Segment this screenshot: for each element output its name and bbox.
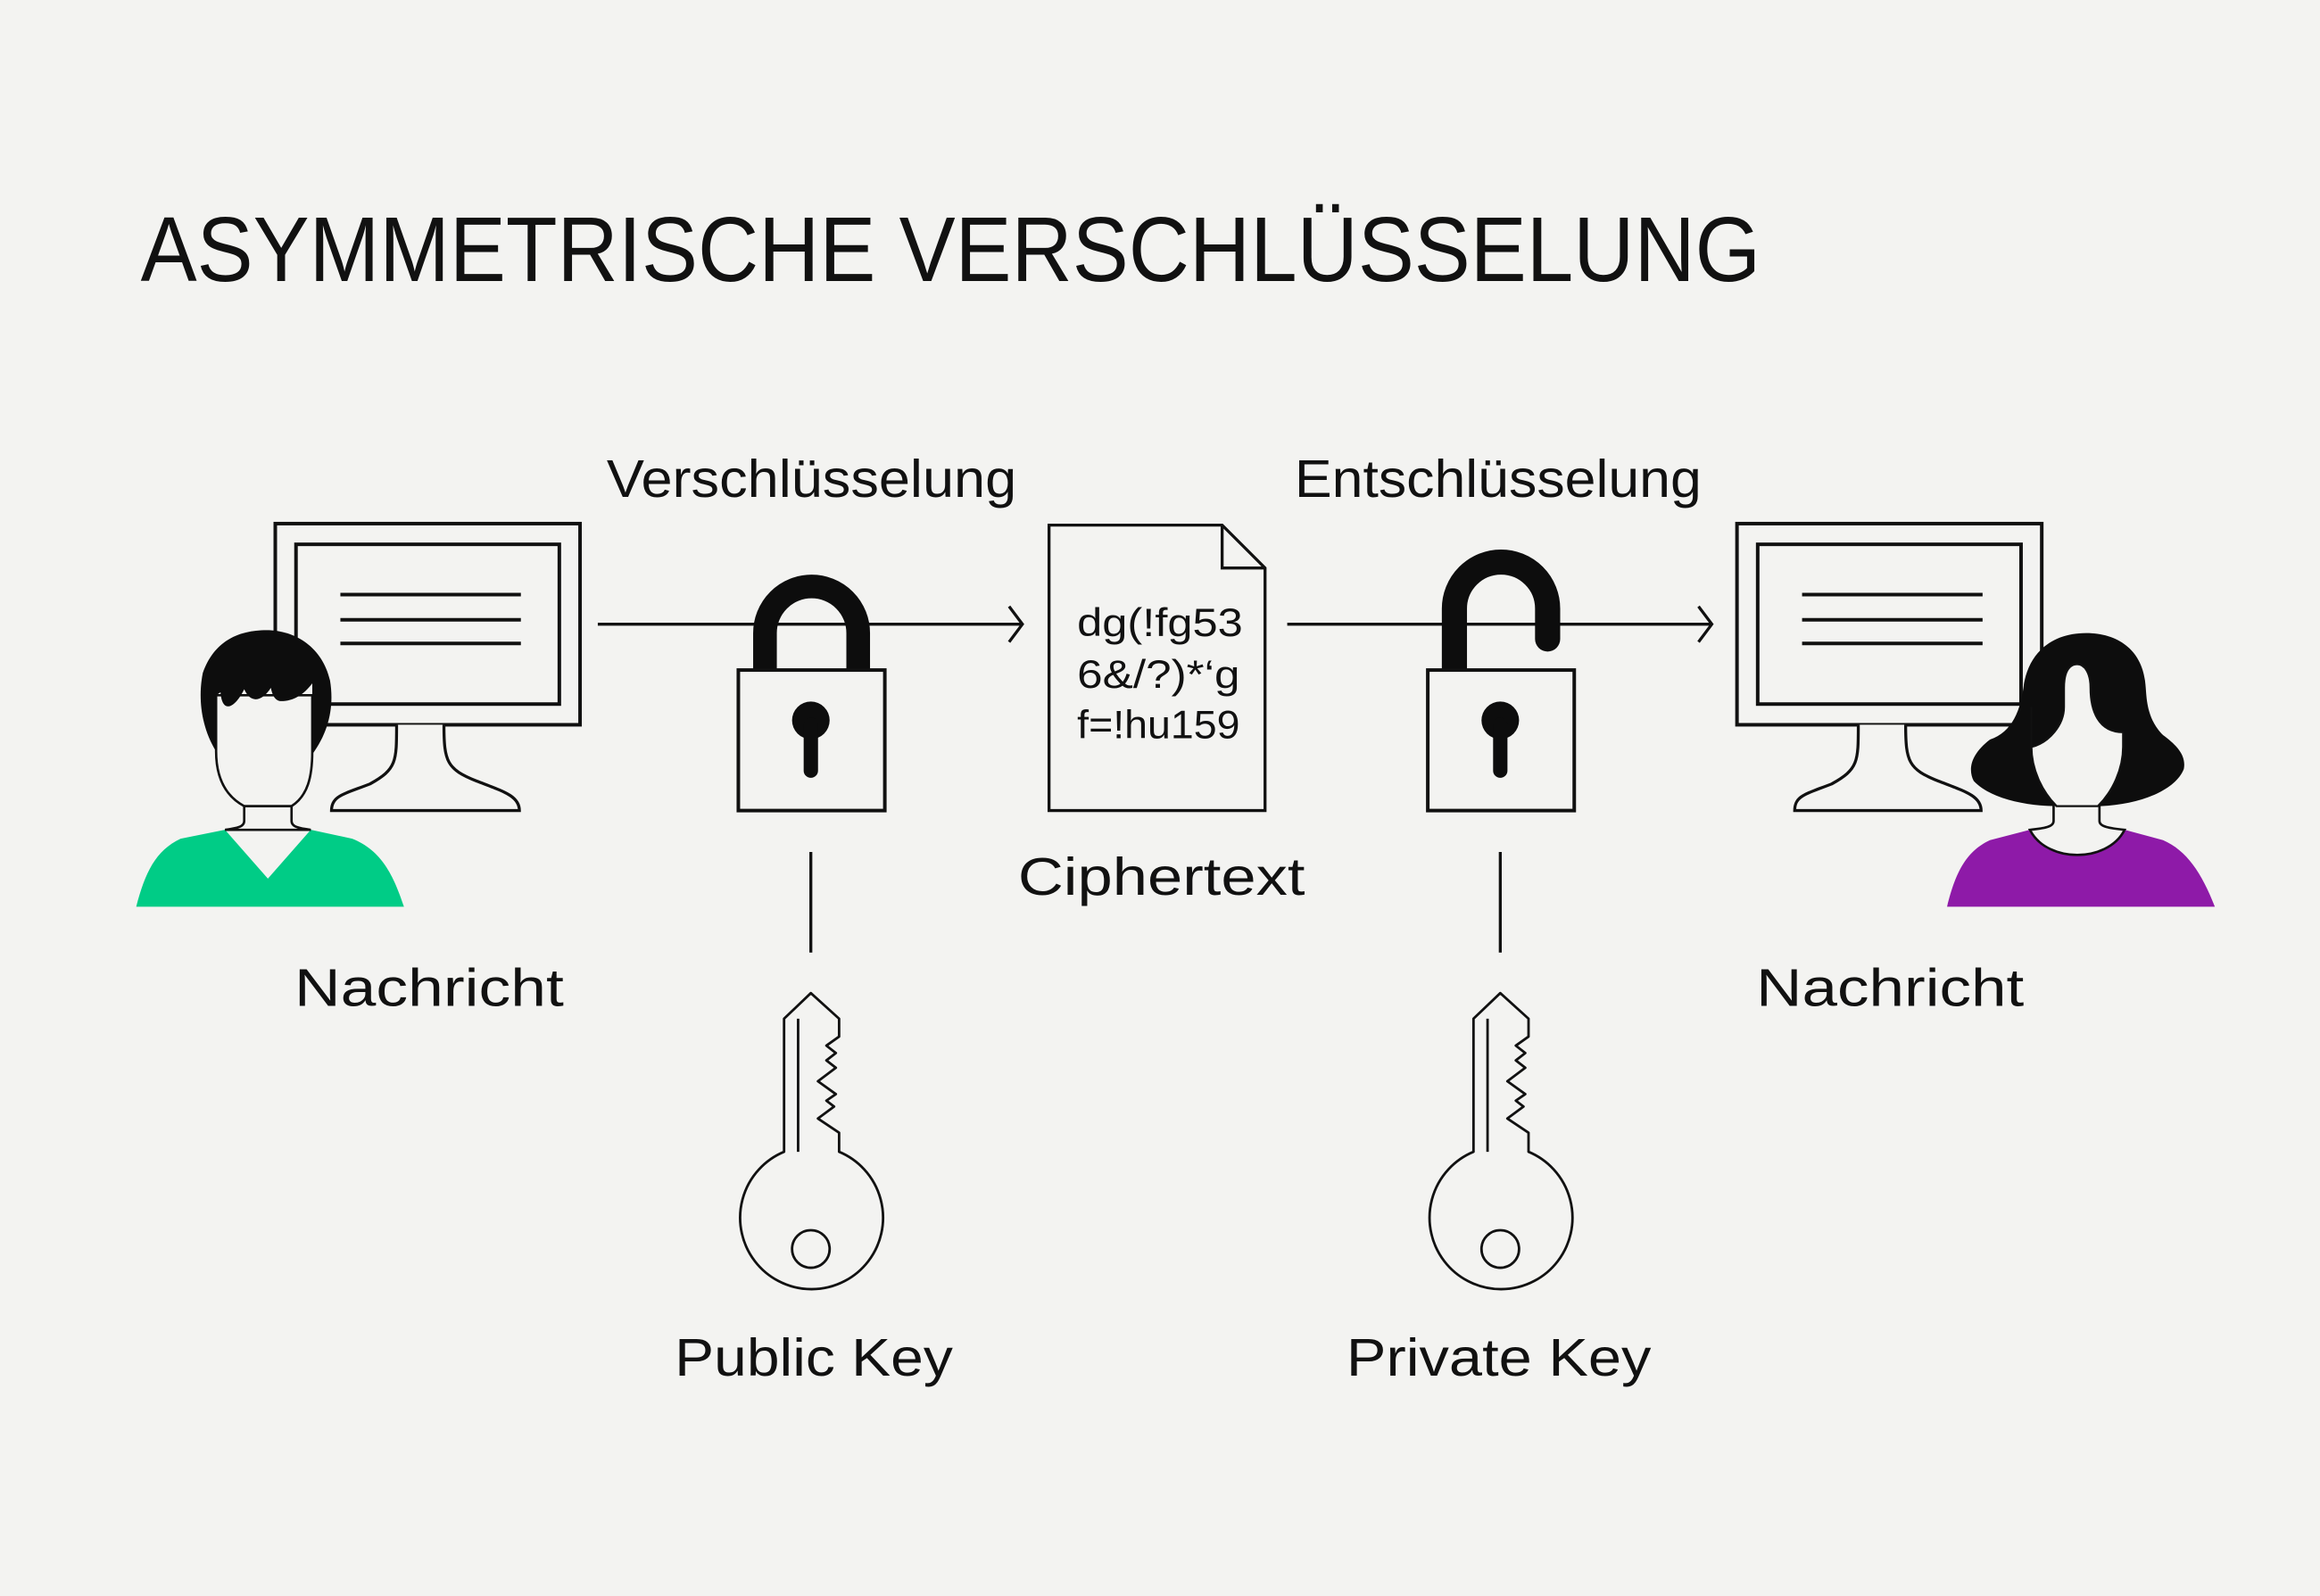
lock: closed [738, 586, 885, 811]
connector line: private key [1499, 852, 1501, 953]
label: Entschlüsselung: Entschlüsselung [1295, 449, 1702, 509]
person: sender [137, 630, 404, 906]
left monitor [276, 524, 580, 811]
document: ciphertext: f=!hu159 [1077, 702, 1240, 747]
label: Private Key: Private Key [1346, 1327, 1652, 1387]
icon: public key [740, 993, 883, 1289]
document: ciphertext: dg(!fg53 [1077, 600, 1243, 645]
arrow: decrypt [1288, 607, 1711, 642]
label: Nachricht left: Nachricht [294, 957, 564, 1017]
right monitor [1737, 524, 2042, 811]
document: ciphertext [1049, 525, 1265, 811]
arrow: encrypt [598, 607, 1023, 642]
title: ASYMMETRISCHE VERSCHLÜSSELUNG [141, 198, 1761, 301]
label: Ciphertext: Ciphertext [1018, 847, 1305, 906]
connector line: public key [810, 852, 812, 953]
lock: open [1428, 562, 1574, 811]
icon: private key [1429, 993, 1572, 1289]
label: Nachricht right: Nachricht [1756, 957, 2025, 1017]
label: Verschlüsselung: Verschlüsselung [607, 449, 1016, 509]
person: recipient [1947, 633, 2215, 906]
document: ciphertext: 6&/?)*‘g [1077, 652, 1240, 697]
label: Public Key: Public Key [675, 1327, 953, 1387]
